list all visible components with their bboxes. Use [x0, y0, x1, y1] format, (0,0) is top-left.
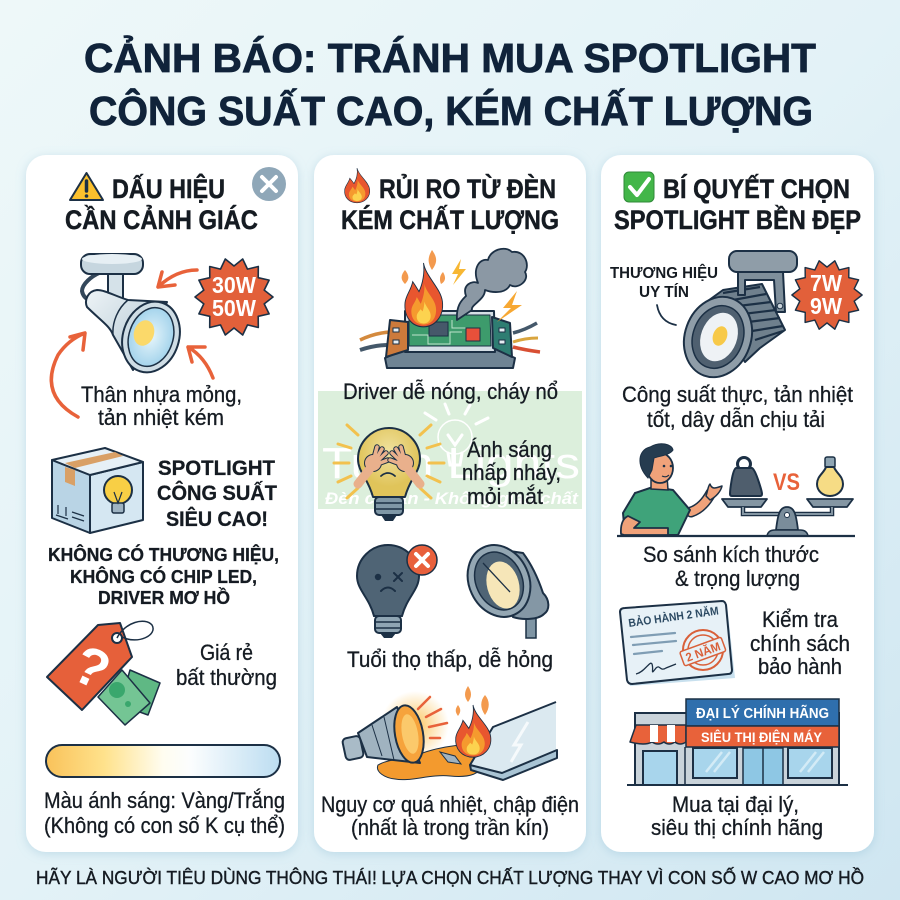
text: compare size and weight: [643, 542, 819, 591]
text: abnormally cheap: Giá rẻ: [200, 640, 253, 665]
arrow: to lamp right: [188, 347, 213, 378]
badge: 30W 50W: 50W: [212, 295, 256, 321]
text: flickering light: [462, 437, 561, 509]
text: flickering light: Ánh sáng: [467, 437, 552, 462]
illustration: burning driver: [360, 249, 540, 368]
heading: risks: RỦI RO TỪ ĐÈN: [379, 172, 556, 204]
icon: warning triangle: [70, 173, 103, 200]
text: overheat risk: (nhất là trong trần kín): [351, 815, 549, 840]
badge: 30W 50W: [195, 259, 273, 335]
text: no brand: KHÔNG CÓ THƯƠNG HIỆU,: [48, 544, 279, 565]
heading: warning signs: CẦN CẢNH GIÁC: [65, 203, 258, 235]
illustration: quality spotlight: [673, 251, 797, 387]
icon: check mark: [624, 172, 654, 202]
text: no brand: [48, 544, 279, 608]
watermark: Đèn chuẩn - Không gian chất: [325, 489, 579, 508]
text: buy at authorised stores: siêu thị chính hãng: [651, 815, 823, 840]
icon: bulb covering eyes: [334, 425, 444, 521]
text: reputable brand: UY TÍN: [639, 284, 689, 301]
watermark: Tuấn Lights: [322, 439, 580, 488]
icon: price tag and money: ?: [64, 634, 119, 702]
illustration: authorised store: SIÊU THỊ ĐIỆN MÁY: [701, 730, 822, 745]
heading: warning signs: [65, 173, 258, 235]
text: super high power: SIÊU CAO!: [166, 507, 268, 531]
icon: close circle: [252, 167, 286, 201]
text: thin plastic body: Thân nhựa mỏng,: [81, 382, 242, 407]
text: real wattage: [622, 382, 853, 432]
icon: dead bulb: [357, 545, 437, 638]
text: overheat risk: [321, 792, 579, 840]
text: check warranty policy: Kiểm tra: [762, 607, 839, 632]
text: check warranty policy: [750, 607, 850, 679]
icon: box with bulb: [52, 448, 143, 533]
text: real wattage: Công suất thực, tản nhiệt: [622, 382, 853, 407]
illustration: man comparing on scale: VS: [773, 469, 800, 496]
text: buy at authorised stores: [651, 792, 823, 840]
footer text: HÃY LÀ NGƯỜI TIÊU DÙNG THÔNG THÁI! LỰA CHỌN CHẤT LƯỢNG THAY VÌ CON SỐ W CAO MƠ HỒ: [36, 867, 864, 888]
text: overheat risk: Nguy cơ quá nhiệt, chập điện: [321, 792, 579, 817]
colour gradient bar: [46, 745, 280, 777]
heading: buying tips: SPOTLIGHT BỀN ĐẸP: [614, 204, 861, 235]
text: no brand: KHÔNG CÓ CHIP LED,: [70, 566, 257, 587]
panel: buying tips: [601, 155, 874, 852]
text: light colour: (Không có con số K cụ thể): [44, 813, 285, 838]
text: thin plastic body: [81, 382, 242, 430]
text: super high power: CÔNG SUẤT: [157, 481, 277, 505]
badge: 7W 9W: 7W: [810, 270, 842, 296]
text: abnormally cheap: bất thường: [176, 665, 277, 690]
text: super high power: [157, 457, 277, 531]
text: light colour: Màu ánh sáng: Vàng/Trắng: [44, 788, 285, 813]
text: buy at authorised stores: Mua tại đại lý,: [672, 792, 799, 817]
text: flickering light: mỏi mắt: [467, 484, 543, 509]
text: short life: Tuổi thọ thấp, dễ hỏng: [347, 647, 553, 672]
icon: warranty card: BẢO HÀNH 2 NĂM: [628, 604, 720, 630]
text: reputable brand: [610, 264, 718, 325]
badge: 30W 50W: 30W: [212, 272, 256, 298]
text: super high power: SPOTLIGHT: [158, 457, 275, 480]
badge: 7W 9W: [792, 261, 862, 329]
text: reputable brand: THƯƠNG HIỆU: [610, 264, 718, 282]
text: real wattage: tốt, dây dẫn chịu tải: [647, 407, 825, 432]
illustration: authorised store: ĐẠI LÝ CHÍNH HÃNG: [696, 704, 829, 722]
watermark: [318, 391, 582, 509]
text: abnormally cheap: [176, 640, 277, 690]
text: check warranty policy: chính sách: [750, 631, 850, 656]
illustration: cheap plastic spotlight: [81, 254, 189, 380]
panel: risks: [314, 155, 586, 852]
heading: risks: [341, 168, 559, 235]
heading: buying tips: [614, 172, 861, 235]
text: flickering light: nhấp nháy,: [462, 460, 561, 485]
icon: fire: [345, 168, 370, 203]
illustration: overheating lamp: [342, 686, 557, 780]
arrow: to lamp top: [158, 270, 197, 287]
icon: broken spotlight: [456, 535, 548, 638]
illustration: authorised store: [627, 699, 848, 785]
text: light colour: [44, 788, 285, 838]
illustration: man comparing on scale: [617, 444, 855, 536]
icon: warranty card: [620, 601, 735, 686]
text: thin plastic body: tản nhiệt kém: [98, 405, 224, 430]
panel: warning signs: [26, 155, 298, 852]
text: compare size and weight: So sánh kích thước: [643, 542, 819, 567]
title: CÔNG SUẤT CAO, KÉM CHẤT LƯỢNG: [89, 88, 813, 134]
heading: risks: KÉM CHẤT LƯỢNG: [341, 204, 559, 235]
text: check warranty policy: bảo hành: [758, 654, 842, 679]
heading: buying tips: BÍ QUYẾT CHỌN: [663, 173, 850, 204]
title: [84, 35, 816, 134]
title: CẢNH BÁO: TRÁNH MUA SPOTLIGHT: [84, 35, 816, 81]
text: no brand: DRIVER MƠ HỒ: [98, 587, 230, 608]
text: compare size and weight: & trọng lượng: [675, 566, 800, 591]
arrow: to lamp left: [51, 333, 85, 417]
icon: price tag and money: [47, 621, 160, 725]
text: driver burns: Driver dễ nóng, cháy nổ: [343, 379, 558, 404]
heading: warning signs: DẤU HIỆU: [112, 173, 225, 204]
badge: 7W 9W: 9W: [810, 293, 842, 319]
icon: warranty card: 2 NĂM: [683, 638, 722, 665]
